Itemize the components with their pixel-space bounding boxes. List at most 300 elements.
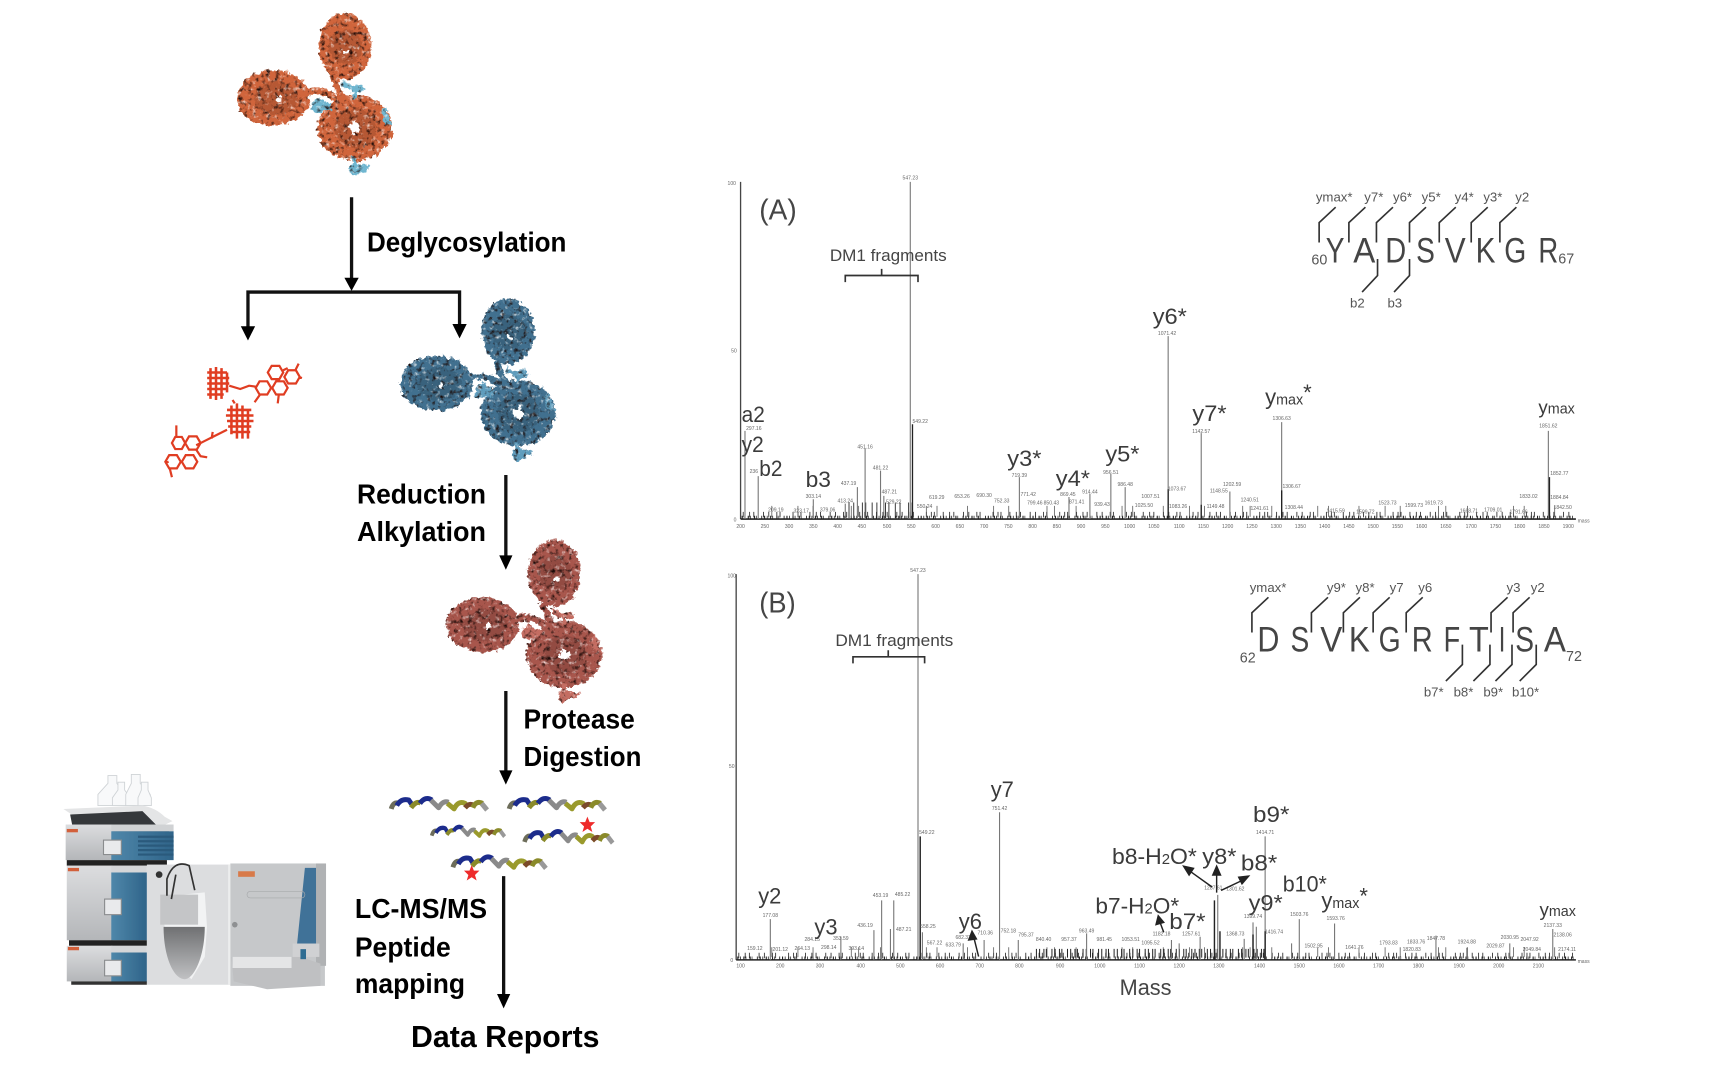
peak value labels A: 1308.44 bbox=[1285, 505, 1303, 511]
peak value labels B: 1793.83 bbox=[1379, 940, 1398, 946]
label: Protease Digestion: Protease bbox=[523, 703, 635, 734]
peak value labels A: 550.24 bbox=[917, 504, 933, 510]
peptide sequence inset A: b2 bbox=[1350, 295, 1365, 310]
x axis ticks A: 650 bbox=[956, 524, 964, 530]
peak value labels A: 1523.73 bbox=[1378, 501, 1397, 507]
label: Protease Digestion bbox=[523, 703, 641, 772]
peak value labels A: 529.22 bbox=[886, 500, 902, 506]
arrow: protease digestion bbox=[499, 691, 512, 785]
x axis ticks A bbox=[728, 181, 1590, 530]
peak value labels A: 771.42 bbox=[1020, 492, 1036, 498]
x axis ticks B: 0 bbox=[730, 958, 733, 964]
peptide sequence inset A: V bbox=[1445, 231, 1466, 270]
peak value labels B: 1503.76 bbox=[1290, 912, 1309, 918]
x axis ticks A: 600 bbox=[931, 524, 940, 530]
x axis ticks A: 50 bbox=[731, 349, 737, 355]
label: Reduction Alkylation: Alkylation bbox=[357, 516, 486, 547]
peptide sequence inset A: y4* bbox=[1455, 190, 1474, 205]
arrow: deglycosylation bbox=[344, 197, 359, 291]
peak value labels B: 710.36 bbox=[978, 931, 993, 937]
peak value labels B: 752.18 bbox=[1001, 928, 1016, 934]
peptide sequence inset B: b9* bbox=[1483, 684, 1503, 699]
peptide sequence inset B: y2 bbox=[1531, 580, 1545, 595]
peak value labels B: 633.79 bbox=[946, 943, 961, 949]
x axis ticks B: 1400 bbox=[1254, 964, 1265, 970]
label: LC-MS/MS Peptide mapping: mapping bbox=[355, 968, 465, 999]
peptide sequence inset B: y3 bbox=[1506, 580, 1520, 595]
peak value labels B: 1287.61 bbox=[1204, 885, 1223, 891]
fragment ion labels B: b7* bbox=[1169, 909, 1206, 934]
peak value labels B: 2029.87 bbox=[1486, 944, 1505, 950]
peak value labels B: 159.12 bbox=[747, 946, 763, 952]
fragment ion labels B: b7-H2O* bbox=[1095, 894, 1180, 919]
x axis ticks A: 1900 bbox=[1563, 524, 1574, 530]
x axis ticks B bbox=[728, 573, 1590, 970]
x axis ticks B: 1800 bbox=[1413, 964, 1424, 970]
peak value labels A: 1415.59 bbox=[1327, 508, 1345, 514]
peak value labels A: 1306.67 bbox=[1282, 484, 1301, 490]
peak value labels A: 323.17 bbox=[793, 508, 809, 514]
x axis ticks A: 1050 bbox=[1148, 524, 1160, 530]
chart: MS/MS spectrum A bbox=[728, 176, 1590, 530]
x axis ticks B: 1900 bbox=[1453, 964, 1465, 970]
peak value labels A: 1073.67 bbox=[1168, 486, 1186, 492]
mass spectrometer right bbox=[230, 863, 325, 986]
mass spectrometer left bbox=[147, 865, 230, 985]
x axis ticks B: 1700 bbox=[1373, 964, 1384, 970]
peak value labels B: 1414.71 bbox=[1256, 830, 1274, 836]
peak value labels A: 869.45 bbox=[1060, 492, 1076, 498]
peak value labels B: 393.14 bbox=[849, 946, 864, 952]
fragment ion labels B: ymax bbox=[1321, 888, 1359, 913]
icon: released red glycans bbox=[165, 364, 302, 477]
peptide sequence inset B: y6 bbox=[1418, 580, 1432, 595]
x axis ticks A: 1650 bbox=[1440, 524, 1452, 530]
x axis ticks B: 400 bbox=[856, 964, 865, 970]
peak value labels A: 547.23 bbox=[903, 176, 918, 182]
fragment ion labels B: y3 bbox=[814, 915, 838, 940]
fragment ion labels B: b9* bbox=[1253, 802, 1290, 827]
annotation arrows B bbox=[969, 866, 1249, 957]
peptide sequence inset A: S bbox=[1416, 231, 1435, 270]
peak value labels B: 485.22 bbox=[895, 892, 910, 898]
x axis ticks A: 1500 bbox=[1368, 524, 1379, 530]
peptide sequence inset A: A bbox=[1353, 231, 1376, 270]
x axis ticks A: 100 bbox=[728, 181, 736, 187]
peak value labels B: 436.19 bbox=[857, 923, 873, 929]
fragment ion labels A: a2 bbox=[742, 402, 765, 427]
DM1 fragments bracket B bbox=[835, 631, 953, 663]
peak value labels A: 1071.42 bbox=[1158, 331, 1176, 337]
peak value labels B: 963.49 bbox=[1079, 928, 1095, 934]
top LC module bbox=[66, 825, 112, 860]
peak value labels A: 1202.59 bbox=[1223, 482, 1241, 488]
peak value labels B: 2049.84 bbox=[1523, 947, 1541, 953]
x axis ticks B: 200 bbox=[776, 964, 785, 970]
peptide sequence inset B: b7* bbox=[1424, 684, 1444, 699]
peak value labels B: 1416.74 bbox=[1265, 929, 1283, 935]
peak value labels A: 1241.61 bbox=[1251, 506, 1269, 512]
x axis ticks A: 350 bbox=[809, 524, 818, 530]
peak value labels B: 177.08 bbox=[763, 913, 778, 919]
peak value labels B: 264.13 bbox=[795, 946, 810, 952]
peak value labels B: 1641.76 bbox=[1345, 945, 1364, 951]
peak value labels B: 1301.62 bbox=[1226, 886, 1245, 892]
peak value labels A: 297.16 bbox=[746, 426, 762, 432]
icon: intact antibody drug conjugate bbox=[237, 13, 393, 175]
peak value labels A: 986.48 bbox=[1117, 482, 1133, 488]
x axis ticks B: 100 bbox=[736, 964, 745, 970]
peptide sequence inset B: A bbox=[1544, 620, 1566, 659]
peak value labels B: 284.15 bbox=[804, 937, 820, 943]
peak value labels B: 2174.11 bbox=[1558, 947, 1576, 953]
peak value labels B: 547.23 bbox=[910, 568, 926, 574]
x axis ticks A: 550 bbox=[907, 524, 916, 530]
fragment ion labels A: ymax bbox=[1538, 396, 1575, 417]
x axis ticks A: 800 bbox=[1028, 524, 1037, 530]
peak value labels A: 1148.55 bbox=[1210, 489, 1228, 495]
peptide sequence inset B: b10* bbox=[1512, 684, 1539, 699]
DM1 fragments bracket A: DM1 fragments bbox=[830, 246, 947, 265]
x axis ticks A: mass bbox=[1578, 518, 1590, 524]
peak value labels A: 871.41 bbox=[1069, 500, 1085, 506]
label: LC-MS/MS Peptide mapping bbox=[355, 893, 487, 999]
arrow: LC-MS/MS to data reports bbox=[497, 876, 510, 1008]
x axis ticks B: 300 bbox=[816, 964, 824, 970]
peak value labels B: 1368.73 bbox=[1226, 932, 1245, 938]
x axis ticks B: 2000 bbox=[1493, 964, 1505, 970]
x axis ticks A: 1600 bbox=[1416, 524, 1427, 530]
peak value labels B: 567.22 bbox=[927, 940, 942, 946]
label: Reduction Alkylation: Reduction bbox=[357, 479, 486, 510]
x axis ticks A: 1400 bbox=[1319, 524, 1330, 530]
x axis ticks B: 500 bbox=[896, 964, 905, 970]
fragment ion labels A bbox=[742, 304, 1575, 492]
x axis ticks B: 100 bbox=[728, 573, 736, 579]
middle LC module bbox=[67, 866, 112, 940]
peak value labels B: 1820.83 bbox=[1403, 947, 1421, 953]
peptide sequence inset B: D bbox=[1257, 620, 1279, 659]
peak value labels A: 481.22 bbox=[873, 465, 888, 471]
peptide sequence inset A: Y bbox=[1326, 231, 1344, 270]
fragment ion labels B: y2 bbox=[758, 884, 781, 909]
chart: MS/MS spectrum B bbox=[728, 568, 1590, 1000]
peak value labels B: 682.32 bbox=[955, 935, 971, 941]
front panel markings bbox=[247, 891, 305, 898]
label: Reduction Alkylation bbox=[357, 479, 486, 547]
peak value labels A: 413.24 bbox=[838, 499, 853, 505]
peak value labels A bbox=[746, 176, 1572, 516]
peak value labels A: 1842.50 bbox=[1554, 505, 1572, 511]
fragment ion labels B: y7 bbox=[991, 777, 1014, 802]
peak value labels B: 487.21 bbox=[896, 927, 912, 933]
x axis ticks B: 900 bbox=[1056, 964, 1065, 970]
x axis ticks A: 1800 bbox=[1514, 524, 1526, 530]
fragment ion labels A: y7* bbox=[1192, 401, 1227, 426]
x axis ticks B: 700 bbox=[976, 964, 984, 970]
peak value labels B: 1833.76 bbox=[1407, 939, 1425, 945]
peak value labels A: 1306.63 bbox=[1273, 416, 1291, 422]
peak value labels A: 1025.50 bbox=[1135, 503, 1153, 509]
panel label B: (B) bbox=[759, 588, 796, 620]
peak value labels B: 1095.52 bbox=[1141, 940, 1160, 946]
peak value labels B: 2138.06 bbox=[1554, 933, 1572, 939]
peptide sequence inset B: S bbox=[1290, 620, 1309, 659]
peak value labels A: 1509.72 bbox=[1356, 510, 1375, 516]
peak value labels A: 1852.77 bbox=[1550, 471, 1569, 477]
peak value labels A: 1709.01 bbox=[1484, 507, 1503, 513]
x axis ticks B: 2100 bbox=[1533, 964, 1544, 970]
peak value labels A: 487.21 bbox=[882, 490, 897, 496]
x axis ticks B: mass bbox=[1578, 959, 1590, 965]
peptide sequence inset B: K bbox=[1349, 620, 1370, 659]
fragment ion labels B: y8* bbox=[1202, 844, 1237, 869]
peak value labels A: 1007.51 bbox=[1141, 494, 1160, 500]
DM1 fragments bracket B: DM1 fragments bbox=[835, 631, 953, 650]
peak value labels A: 956.51 bbox=[1103, 470, 1119, 476]
peak value labels A: 619.29 bbox=[929, 495, 945, 501]
fragment ion labels A: y2 bbox=[742, 432, 764, 457]
peak value labels A: 1149.48 bbox=[1207, 504, 1225, 510]
peak value labels B: 453.19 bbox=[873, 893, 888, 899]
peptide sequence inset A: R bbox=[1538, 231, 1558, 270]
icon: reduced alkylated antibody bbox=[446, 540, 603, 702]
bottom LC module bbox=[67, 946, 112, 981]
peak value labels B: 201.12 bbox=[773, 947, 788, 953]
label: LC-MS/MS Peptide mapping: Peptide bbox=[355, 932, 451, 963]
peak value labels B: 2030.95 bbox=[1501, 935, 1519, 941]
x axis ticks A: 300 bbox=[785, 524, 793, 530]
peak value labels A: 690.30 bbox=[976, 493, 992, 499]
peaks B bbox=[770, 574, 1553, 960]
peak value labels B: 1182.18 bbox=[1153, 932, 1171, 938]
peak value labels B: 1593.76 bbox=[1327, 916, 1345, 922]
x axis ticks A: 1850 bbox=[1538, 524, 1550, 530]
peak value labels A: 653.26 bbox=[954, 494, 970, 500]
peptide sequence inset B: S bbox=[1515, 620, 1534, 659]
peak value labels A: 752.33 bbox=[994, 499, 1010, 505]
x axis ticks A: 1250 bbox=[1246, 524, 1258, 530]
fragment ion labels A: y5* bbox=[1105, 442, 1140, 467]
peak value labels B: 2047.92 bbox=[1520, 937, 1539, 943]
peptide sequence inset A: ymax* bbox=[1316, 190, 1353, 205]
fragment ion labels B bbox=[758, 777, 1576, 940]
peptide sequence inset B: 62 bbox=[1240, 650, 1256, 666]
peptide sequence inset A bbox=[1311, 190, 1574, 310]
peak value labels A: 1240.51 bbox=[1241, 497, 1259, 503]
peptide sequence inset B: y7 bbox=[1390, 580, 1404, 595]
peak value labels A: 1599.73 bbox=[1405, 503, 1423, 509]
x axis ticks A: 400 bbox=[833, 524, 842, 530]
icon: digested peptide helices bbox=[391, 798, 613, 881]
fragment ion labels B: * bbox=[1359, 884, 1368, 909]
peak value labels B: 558.25 bbox=[920, 924, 936, 930]
logo marks bbox=[67, 829, 78, 832]
peak value labels A: 939.43 bbox=[1094, 502, 1110, 508]
peptide sequence inset A: G bbox=[1504, 231, 1526, 270]
bottles bbox=[98, 774, 151, 806]
x axis ticks A: 1200 bbox=[1222, 524, 1233, 530]
peak value labels B: 957.37 bbox=[1061, 937, 1077, 943]
peak value labels B: 840.40 bbox=[1036, 937, 1052, 943]
x axis title: Mass: Mass bbox=[1120, 975, 1171, 1000]
icon: red star drug marker bbox=[580, 817, 595, 832]
peak value labels B: 1924.88 bbox=[1458, 939, 1476, 945]
peak value labels B: 353.59 bbox=[833, 936, 849, 942]
fragment ion labels B: b8-H2O* bbox=[1112, 844, 1197, 869]
fragment ion labels B: y6 bbox=[959, 909, 982, 934]
x axis ticks B: 1000 bbox=[1094, 964, 1106, 970]
peak value labels A: 1851.62 bbox=[1539, 424, 1558, 430]
x axis ticks A: 1700 bbox=[1466, 524, 1477, 530]
fragment ion labels A: * bbox=[1303, 380, 1312, 405]
peak value labels B: 1399.74 bbox=[1244, 914, 1262, 920]
peptide sequence inset A: y2 bbox=[1515, 190, 1529, 205]
x axis ticks B: 600 bbox=[936, 964, 944, 970]
peak value labels A: 1619.73 bbox=[1425, 501, 1443, 507]
label: Protease Digestion: Digestion bbox=[523, 741, 641, 772]
x axis ticks A: 700 bbox=[980, 524, 989, 530]
baseline noise A bbox=[742, 510, 1574, 517]
x axis ticks B: 1300 bbox=[1213, 964, 1225, 970]
peptide sequence inset A: y5* bbox=[1422, 190, 1441, 205]
x axis ticks A: 1000 bbox=[1124, 524, 1135, 530]
x axis ticks A: 1550 bbox=[1392, 524, 1403, 530]
peptide sequence inset B: T bbox=[1469, 620, 1489, 659]
x axis ticks A: 1150 bbox=[1198, 524, 1209, 530]
peak value labels A: 549.22 bbox=[912, 419, 928, 425]
x axis ticks B: 1600 bbox=[1333, 964, 1345, 970]
peak value labels A: 1833.02 bbox=[1519, 494, 1538, 500]
peptide sequence inset B: R bbox=[1412, 620, 1433, 659]
x axis ticks B: 1100 bbox=[1134, 964, 1145, 970]
peptide sequence inset B: 72 bbox=[1566, 649, 1582, 665]
peaks A bbox=[745, 182, 1548, 519]
peptide sequence inset A: D bbox=[1385, 231, 1406, 270]
icon: deglycosylated blue antibody bbox=[400, 299, 557, 461]
fragment ion labels A: y4* bbox=[1056, 466, 1090, 491]
peptide sequence inset B: b8* bbox=[1454, 684, 1473, 699]
x axis ticks B: 50 bbox=[729, 764, 735, 770]
x axis ticks A: 1100 bbox=[1174, 524, 1185, 530]
panel label A: (A) bbox=[759, 194, 797, 226]
x axis ticks A: 1350 bbox=[1295, 524, 1306, 530]
x axis ticks A: 1450 bbox=[1343, 524, 1355, 530]
peak value labels A: 1142.57 bbox=[1192, 429, 1210, 435]
glycan upper bbox=[207, 364, 302, 403]
peak value labels B: 795.37 bbox=[1018, 933, 1034, 939]
peptide sequence inset A: y7* bbox=[1364, 190, 1383, 205]
peak value labels B: 1847.78 bbox=[1427, 936, 1445, 942]
x axis ticks A: 900 bbox=[1077, 524, 1086, 530]
peak value labels A: 850.43 bbox=[1044, 501, 1059, 507]
peptide sequence inset A: y3* bbox=[1483, 190, 1502, 205]
fragment ion labels A: ymax bbox=[1265, 384, 1303, 409]
peptide sequence inset B: y8* bbox=[1356, 580, 1375, 595]
peak value labels B: 549.22 bbox=[919, 830, 935, 836]
x axis ticks A: 500 bbox=[883, 524, 892, 530]
peak value labels A: 303.14 bbox=[806, 494, 821, 500]
peak value labels A: 1668.71 bbox=[1460, 508, 1478, 514]
peptide sequence inset A: b3 bbox=[1387, 295, 1402, 310]
peak value labels A: 1791.66 bbox=[1509, 510, 1528, 516]
peak value labels A: 719.39 bbox=[1012, 473, 1027, 479]
x axis ticks A: 0 bbox=[734, 517, 737, 523]
peptide sequence inset B: G bbox=[1379, 620, 1401, 659]
peak value labels A: 451.16 bbox=[857, 445, 873, 451]
peak value labels A: 437.19 bbox=[841, 481, 856, 487]
glycan lower bbox=[165, 400, 253, 477]
peak value labels B: 298.14 bbox=[821, 945, 837, 951]
fragment ion labels A: y3* bbox=[1007, 446, 1042, 471]
peak value labels A: 209.19 bbox=[768, 507, 784, 513]
peptide sequence inset B: I bbox=[1499, 620, 1505, 659]
fragment ion labels A: b3 bbox=[806, 467, 831, 492]
arrow: branching to glycans and antibody bbox=[241, 292, 467, 341]
label: Deglycosylation: Deglycosylation bbox=[367, 226, 566, 257]
peptide sequence inset A: K bbox=[1476, 231, 1496, 270]
DM1 fragments bracket A bbox=[830, 246, 947, 282]
peptide sequence inset B: y9* bbox=[1327, 580, 1346, 595]
y axis A bbox=[741, 182, 1576, 519]
fragment ion labels B: b10* bbox=[1283, 872, 1327, 897]
peak value labels B: 981.45 bbox=[1097, 937, 1112, 943]
label: Data Reports: Data Reports bbox=[411, 1019, 600, 1054]
x axis ticks B: 800 bbox=[1015, 964, 1024, 970]
x axis ticks A: 450 bbox=[858, 524, 866, 530]
peak value labels A: 1083.26 bbox=[1169, 504, 1187, 510]
peptide sequence inset B: ymax* bbox=[1250, 580, 1286, 595]
label: LC-MS/MS Peptide mapping: LC-MS/MS bbox=[355, 893, 487, 924]
x axis ticks A: 1300 bbox=[1271, 524, 1282, 530]
baseline noise B bbox=[737, 952, 1574, 958]
peak value labels B: 1053.51 bbox=[1122, 937, 1140, 943]
fragment ion labels B: b8* bbox=[1241, 851, 1278, 876]
peptide sequence inset A: 67 bbox=[1558, 251, 1574, 267]
arrow: reduction alkylation bbox=[499, 475, 512, 570]
x axis ticks A: 250 bbox=[761, 524, 769, 530]
peak value labels A: 379.06 bbox=[820, 507, 836, 513]
solvent tray bbox=[63, 806, 172, 829]
fragment ion labels A: b2 bbox=[759, 456, 782, 481]
peak value labels B: 2137.33 bbox=[1544, 923, 1562, 929]
peak value labels B: 1257.61 bbox=[1182, 932, 1201, 938]
x axis ticks A: 1750 bbox=[1490, 524, 1501, 530]
x axis ticks A: 750 bbox=[1004, 524, 1013, 530]
x axis ticks A: 850 bbox=[1053, 524, 1061, 530]
fragment ion labels B: ymax bbox=[1540, 899, 1576, 920]
x axis ticks B: 1500 bbox=[1294, 964, 1305, 970]
peptide sequence inset B: F bbox=[1444, 620, 1460, 659]
peak value labels A: 236 bbox=[750, 469, 758, 475]
icon: LC-MS instrument bbox=[63, 774, 326, 989]
fragment ion labels A: y6* bbox=[1153, 304, 1187, 329]
fragment ion labels B: y9* bbox=[1249, 890, 1283, 915]
peak value labels A: 799.46 bbox=[1027, 501, 1043, 507]
peak value labels A: 914.44 bbox=[1082, 490, 1098, 496]
peak value labels B bbox=[747, 568, 1576, 953]
peak value labels B: 751.42 bbox=[992, 806, 1007, 812]
peptide sequence inset A: y6* bbox=[1393, 190, 1412, 205]
peak value labels A: 1884.84 bbox=[1550, 495, 1569, 501]
peak value labels B: 1502.95 bbox=[1305, 944, 1323, 950]
x axis ticks B: 1200 bbox=[1174, 964, 1185, 970]
x axis ticks A: 950 bbox=[1101, 524, 1110, 530]
peptide sequence inset A: 60 bbox=[1311, 252, 1327, 268]
peptide sequence inset B bbox=[1240, 580, 1582, 699]
y axis B bbox=[736, 574, 1576, 960]
x axis ticks A: 200 bbox=[736, 524, 745, 530]
